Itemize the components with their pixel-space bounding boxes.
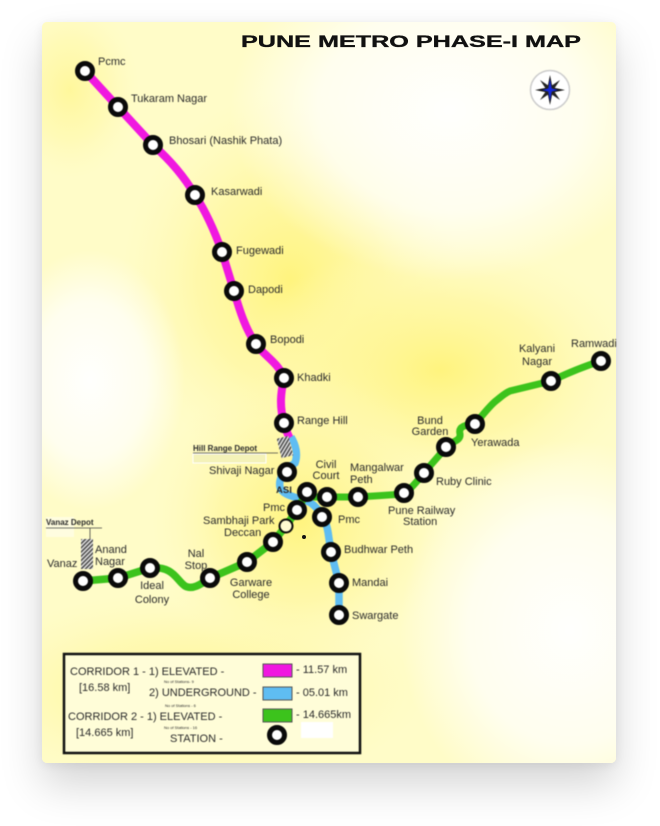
- legend text: No of Stations- 9: [164, 679, 195, 684]
- legend swatches: [263, 664, 292, 722]
- station labels: Station: [403, 516, 437, 528]
- legend text: [68, 664, 351, 745]
- legend text: No of Stations - 6: [165, 703, 197, 708]
- station labels: Mandai: [352, 577, 388, 589]
- line: corridor 2 elevated (green) west: [83, 492, 307, 587]
- station labels: Ideal: [140, 580, 164, 592]
- map illustration: [42, 22, 617, 763]
- station labels: Khadki: [297, 372, 331, 384]
- depot: Hill Range: [193, 436, 293, 463]
- icon: compass rose: [530, 70, 570, 110]
- legend station icon: [270, 728, 284, 742]
- background colour wash: [42, 22, 616, 763]
- station labels: Kalyani: [519, 343, 555, 355]
- legend text: 2) UNDERGROUND -: [149, 687, 257, 699]
- legend text: [16.58 km]: [79, 682, 130, 694]
- station labels: Pmc: [263, 502, 286, 514]
- station labels: Pcmc: [98, 56, 126, 68]
- station labels: Dapodi: [248, 284, 283, 296]
- station labels: Anand: [95, 544, 127, 556]
- station labels: Vanaz: [47, 558, 77, 570]
- depot: Vanaz: [46, 517, 102, 569]
- station labels: Bund: [417, 415, 443, 427]
- station labels: Fugewadi: [236, 245, 284, 257]
- station labels: Colony: [135, 594, 170, 606]
- legend text: - 11.57 km: [296, 664, 347, 676]
- legend text: - 05.01 km: [296, 687, 348, 699]
- station labels: Ramwadi: [571, 338, 617, 350]
- station labels: Stop: [185, 560, 207, 572]
- station labels: Deccan: [224, 527, 261, 539]
- station labels: Civil: [316, 459, 336, 471]
- depot: Vanaz: Vanaz Depot: [46, 518, 94, 527]
- map card background: [42, 22, 616, 763]
- station labels: Court: [313, 470, 339, 482]
- station labels: Yerawada: [471, 437, 520, 449]
- legend: [64, 654, 360, 753]
- station labels: Range Hill: [297, 415, 348, 427]
- station labels: Nal: [188, 548, 204, 560]
- station labels: Ruby Clinic: [436, 476, 492, 488]
- station labels: [47, 56, 617, 622]
- legend text: CORRIDOR 2 - 1) ELEVATED -: [68, 711, 223, 723]
- station labels: Bopodi: [270, 334, 304, 346]
- station labels: Kasarwadi: [211, 186, 262, 198]
- station labels: College: [232, 589, 270, 601]
- station labels: Pune Railway: [388, 505, 456, 517]
- station labels: Pmc: [338, 514, 360, 526]
- depot: Hill Range: Hill Range Depot: [193, 444, 257, 453]
- line: corridor 1 underground (blue): [280, 437, 339, 615]
- small map dot: [302, 535, 306, 539]
- line: corridor 2 elevated (green) east: [313, 361, 601, 497]
- station labels: Budhwar Peth: [344, 544, 413, 556]
- station labels: Bhosari (Nashik Phata): [169, 135, 282, 147]
- station labels: Nagar: [522, 356, 552, 368]
- title: PUNE METRO PHASE-I MAP: [241, 33, 581, 51]
- station labels: Garden: [412, 426, 448, 438]
- station labels: Nagar: [95, 556, 125, 568]
- station labels: Garware: [230, 577, 272, 589]
- stations: [76, 64, 608, 622]
- station labels: Sambhaji Park: [203, 515, 275, 527]
- legend text: CORRIDOR 1 - 1) ELEVATED -: [70, 666, 225, 678]
- legend text: STATION -: [170, 733, 223, 745]
- legend text: - 14.665km: [296, 709, 351, 721]
- station labels: Tukaram Nagar: [131, 93, 207, 105]
- station labels: Peth: [350, 474, 373, 486]
- station labels: Mangalwar: [350, 462, 404, 474]
- legend text: No of Stations - 16: [164, 725, 198, 730]
- station labels: Swargate: [352, 610, 398, 622]
- line: corridor 1 elevated (magenta): [85, 71, 291, 441]
- station labels: ASI: [276, 485, 292, 496]
- station labels: Shivaji Nagar: [209, 465, 275, 477]
- legend text: [14.665 km]: [76, 727, 133, 739]
